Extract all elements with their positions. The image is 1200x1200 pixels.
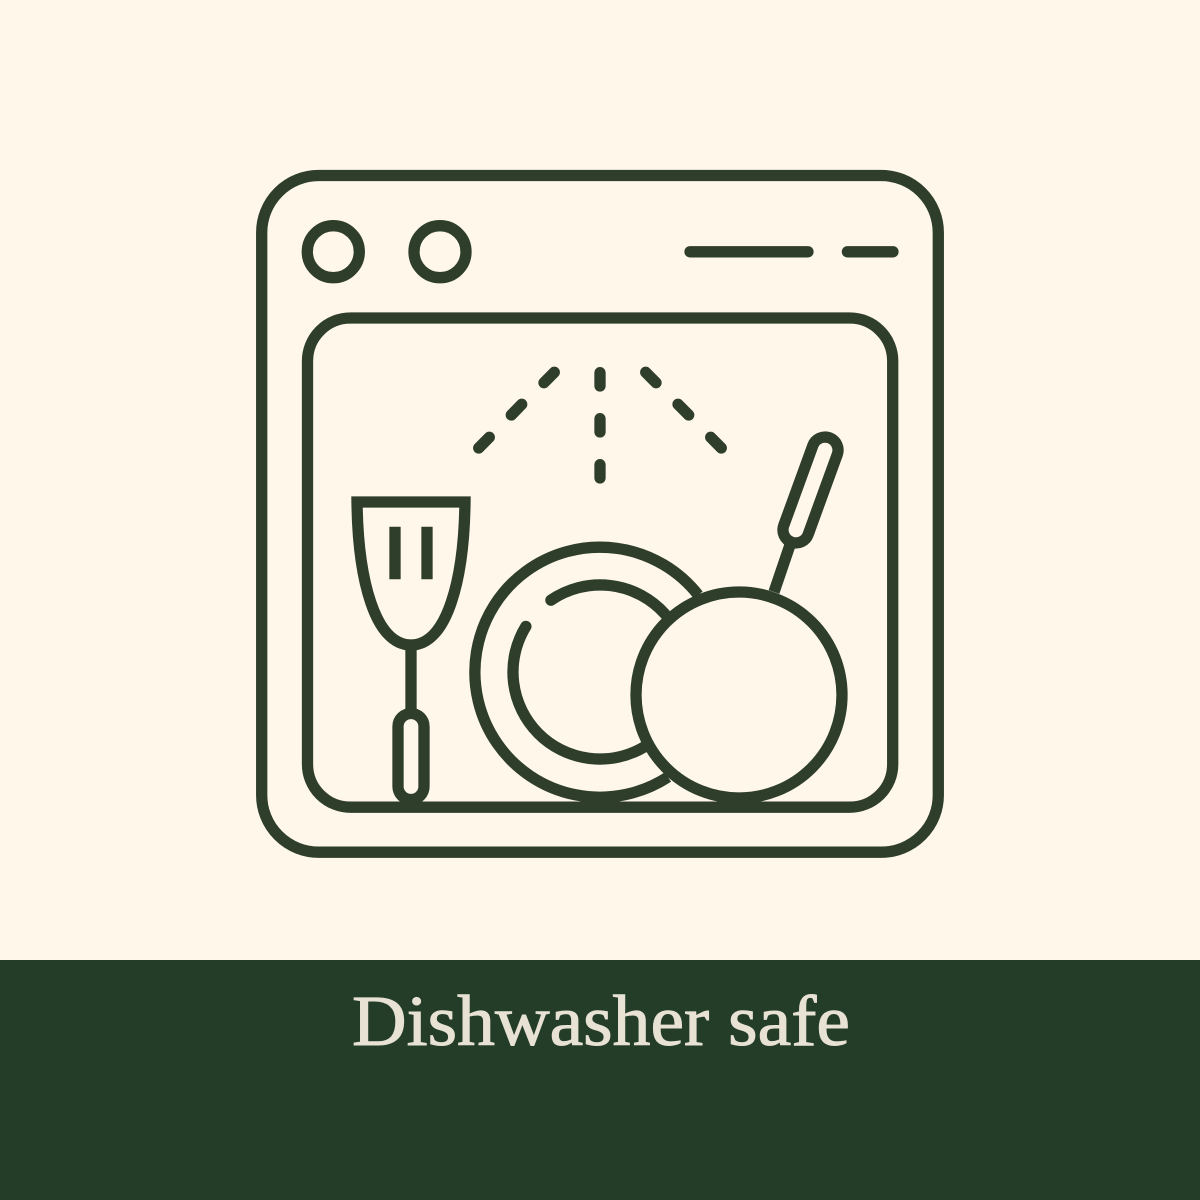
- frying pan: [636, 433, 842, 798]
- caption: Dishwasher safe: [352, 981, 850, 1061]
- control knobs: [307, 226, 466, 278]
- dishwasher body: [262, 176, 938, 852]
- door window: [308, 318, 893, 807]
- footer band: [0, 960, 1200, 1200]
- icon: dishwasher: [262, 176, 938, 852]
- water spray: [479, 372, 721, 478]
- plate: [475, 547, 698, 797]
- display lines: [690, 246, 893, 257]
- spatula: [357, 502, 465, 800]
